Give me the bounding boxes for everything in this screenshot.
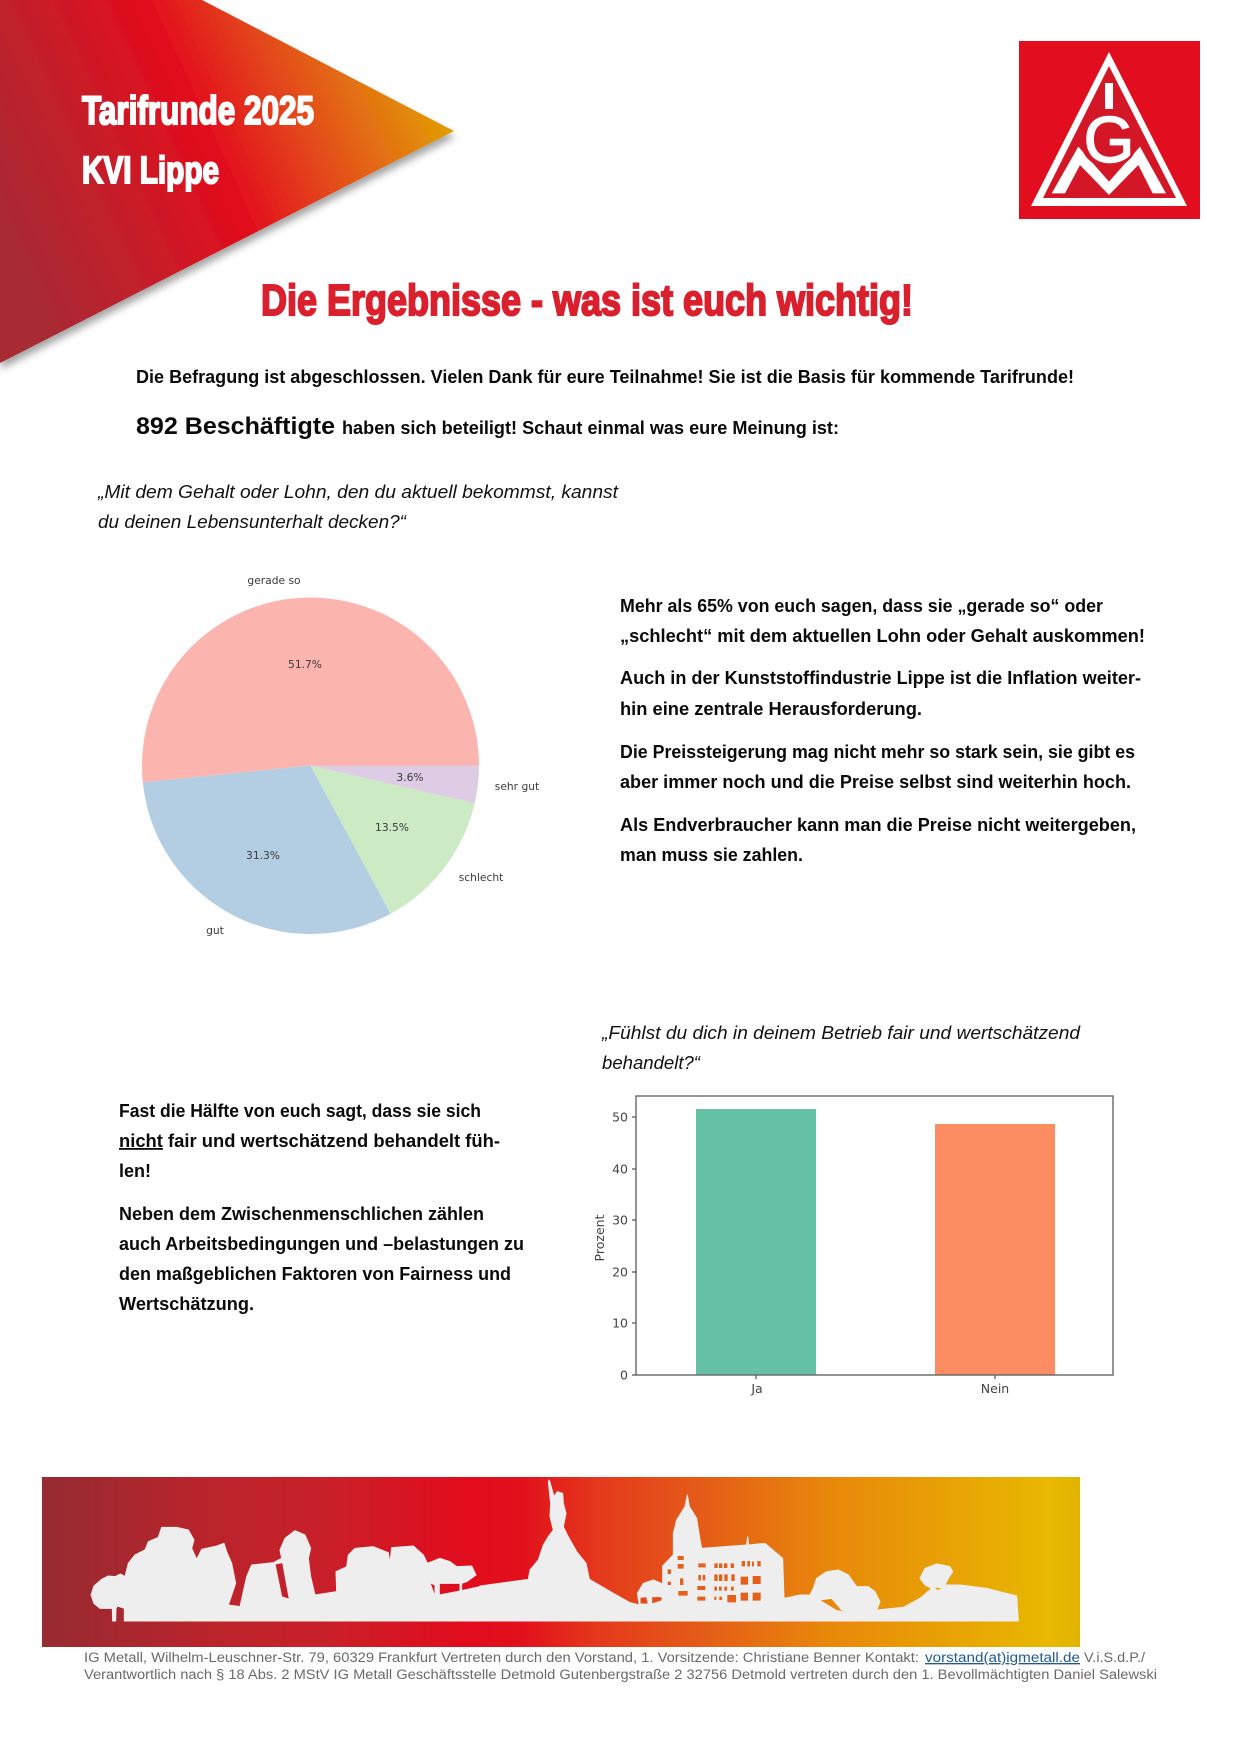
bar chart: Ja: [750, 1381, 763, 1396]
footer legal text: vorstand(at)igmetall.de: [925, 1650, 1080, 1665]
text block: pie commentary: Mehr als 65% von euch sagen, dass sie „gerade so“ oder: [620, 596, 1103, 616]
question 1: [97, 481, 619, 532]
intro text: 892 Beschäftigte: [136, 413, 335, 440]
pie chart: 13.5%: [375, 821, 409, 834]
text block: pie commentary: „schlecht“ mit dem aktuellen Lohn oder Gehalt auskommen!: [620, 626, 1145, 646]
question 2: „Fühlst du dich in deinem Betrieb fair und wertschätzend: [601, 1022, 1081, 1043]
question 2: [601, 1022, 1081, 1073]
bar: Ja: [696, 1109, 816, 1375]
skyline: hill with trees: [800, 1564, 1018, 1621]
pie chart: schlecht: [459, 871, 503, 884]
pie chart: 31.3%: [246, 849, 280, 862]
intro text: haben sich beteiligt! Schaut einmal was eure Meinung ist:: [342, 418, 839, 438]
skyline: monument and castle: [480, 1480, 800, 1621]
text block: fairness commentary: auch Arbeitsbedingungen und –belastungen zu: [119, 1234, 524, 1254]
icon: IG Metall logo: G: [1084, 103, 1134, 176]
text block: fairness commentary: [119, 1101, 524, 1314]
pie chart: 3.6%: [396, 771, 424, 784]
text block: pie commentary: Als Endverbraucher kann man die Preise nicht weitergeben,: [620, 815, 1136, 835]
skyline: trees and rocks: [91, 1527, 480, 1621]
text block: fairness commentary: Fast die Hälfte von euch sagt, dass sie sich: [119, 1101, 481, 1121]
text block: fairness commentary: len!: [119, 1161, 151, 1181]
intro text: [136, 367, 1074, 440]
bar chart: 40: [612, 1162, 628, 1176]
text block: fairness commentary: nicht fair und wertschätzend behandelt füh-: [119, 1131, 500, 1151]
text block: pie commentary: man muss sie zahlen.: [620, 845, 803, 865]
footer legal text: IG Metall, Wilhelm-Leuschner-Str. 79, 60329 Frankfurt Vertreten durch den Vorstand, 1. Vorsitzende: Christiane Benner Kontakt:: [84, 1650, 919, 1665]
text block: pie commentary: [620, 596, 1145, 865]
bar chart: Prozent: [592, 1214, 607, 1261]
footer legal text: [84, 1650, 1157, 1682]
bar chart: Nein: [981, 1381, 1009, 1396]
text block: fairness commentary: Wertschätzung.: [119, 1294, 254, 1314]
pie chart: sehr gut: [495, 780, 539, 793]
bar chart: [592, 1096, 1113, 1396]
pie chart: gut: [206, 924, 224, 937]
question 1: „Mit dem Gehalt oder Lohn, den du aktuell bekommst, kannst: [97, 481, 619, 502]
question 1: du deinen Lebensunterhalt decken?“: [98, 511, 407, 532]
heading: Die Ergebnisse - was ist euch wichtig!: [261, 276, 913, 325]
pie chart: gerade so: [247, 574, 301, 587]
text block: fairness commentary: Neben dem Zwischenmenschlichen zählen: [119, 1204, 484, 1224]
text block: pie commentary: Auch in der Kunststoffindustrie Lippe ist die Inflation weiter-: [620, 668, 1141, 688]
pie chart: 51.7%: [288, 658, 322, 671]
text block: pie commentary: Die Preissteigerung mag nicht mehr so stark sein, sie gibt es: [620, 742, 1135, 762]
footer legal text: V.i.S.d.P./: [1084, 1650, 1145, 1665]
bar chart: 10: [612, 1316, 628, 1330]
footer legal text: Verantwortlich nach § 18 Abs. 2 MStV IG Metall Geschäftsstelle Detmold Gutenbergstraße 2 32756 Detmold vertreten durch den 1. Bevollmächtigten Daniel Salewski: [84, 1667, 1157, 1682]
text block: pie commentary: hin eine zentrale Herausforderung.: [620, 699, 922, 719]
bar chart: 0: [620, 1368, 628, 1382]
intro text: Die Befragung ist abgeschlossen. Vielen Dank für eure Teilnahme! Sie ist die Basis für kommende Tarifrunde!: [136, 367, 1074, 387]
question 2: behandelt?“: [602, 1052, 701, 1073]
text block: fairness commentary: den maßgeblichen Faktoren von Fairness und: [119, 1264, 511, 1284]
title: Tarifrunde 2025: Tarifrunde 2025: [82, 89, 314, 133]
pie chart: [142, 574, 539, 937]
header triangle banner: [0, 0, 454, 363]
bar chart: 50: [612, 1110, 628, 1124]
bar: Nein: [935, 1124, 1055, 1375]
castle windows: [668, 1556, 761, 1602]
bar chart: 30: [612, 1212, 628, 1228]
bar chart: 20: [612, 1264, 628, 1280]
text block: pie commentary: aber immer noch und die Preise selbst sind weiterhin hoch.: [620, 772, 1131, 792]
subtitle: KVI Lippe: KVI Lippe: [82, 150, 219, 192]
icon: IG Metall logo: [1019, 41, 1200, 219]
footer banner with skyline: [42, 1477, 1080, 1647]
